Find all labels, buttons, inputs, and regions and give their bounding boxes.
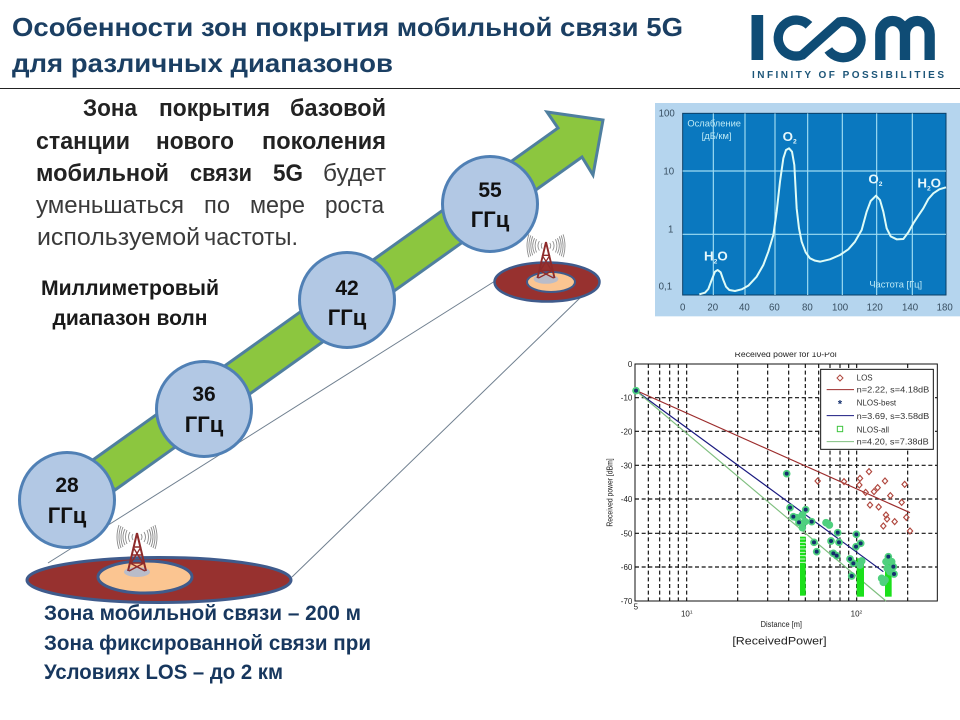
legend [821, 369, 933, 449]
chart: attenuation vs frequency: 80 [802, 302, 813, 313]
text block: coverage description: базовой [290, 95, 386, 122]
logo: ICOM [752, 15, 944, 81]
axes labels: 0 [628, 360, 633, 369]
circle: 28 GHz: 28 [55, 474, 79, 497]
axes labels: 10 [681, 610, 690, 619]
coverage zone: large with tower [27, 525, 291, 602]
chart: attenuation vs frequency: 2 [927, 185, 931, 192]
axes labels: -30 [621, 461, 633, 470]
axes labels: 1 [690, 609, 693, 615]
markers: LOS [815, 469, 913, 534]
axes labels: -10 [621, 394, 633, 403]
text block: coverage description: покрытия [159, 95, 270, 122]
text block: coverage description: поколения [262, 128, 386, 155]
text block: coverage description: уменьшаться [36, 192, 184, 219]
text block: coverage description: Зона [83, 95, 138, 122]
axes labels: [ReceivedPower] [732, 635, 827, 647]
chart: attenuation vs frequency: 100 [832, 302, 848, 313]
title: для различных диапазонов [12, 48, 393, 78]
label: millimeter wave band: Миллиметровый [41, 277, 219, 300]
chart: attenuation vs frequency: O [931, 176, 941, 191]
text block: coverage description: мере [250, 192, 305, 219]
label: millimeter wave band: диапазон волн [52, 307, 208, 330]
text block: coverage description: частоты. [204, 224, 298, 251]
circle: 36 GHz: ГГц [185, 412, 224, 437]
chart: attenuation vs frequency: O [717, 249, 728, 264]
chart: received power vs distance [605, 349, 937, 647]
chart: attenuation vs frequency: 120 [867, 302, 883, 313]
legend: n=2.22, s=4.18dB [857, 386, 929, 395]
legend: LOS [857, 373, 873, 382]
legend: n=4.20, s=7.38dB [857, 437, 929, 446]
chart: attenuation vs frequency: 10 [663, 166, 674, 177]
markers: NLOS-best [636, 391, 894, 576]
chart: attenuation vs frequency: 20 [707, 302, 718, 313]
circle: 36 GHz: 36 [192, 383, 216, 406]
legend: NLOS-all [857, 425, 889, 434]
text block: coverage description: связи [190, 160, 252, 187]
coverage notes: Зона фиксированной связи при [44, 632, 371, 655]
chart: attenuation vs frequency: 140 [902, 302, 918, 313]
chart: attenuation vs frequency: 40 [739, 302, 750, 313]
title: Особенности зон покрытия мобильной связи 5G [12, 12, 683, 42]
chart: attenuation vs frequency: O [783, 129, 793, 144]
text block: coverage description: будет [323, 160, 386, 187]
chart: attenuation vs frequency: 2 [879, 181, 883, 188]
text block: coverage description: используемой [37, 224, 200, 251]
chart: attenuation vs frequency: H [917, 176, 927, 191]
label: millimeter wave band [41, 277, 219, 330]
axes labels: 5 [634, 602, 639, 611]
axes labels: -70 [621, 597, 633, 606]
axes labels: -20 [621, 427, 633, 436]
text block: coverage description: роста [325, 192, 385, 219]
coverage notes [44, 602, 371, 684]
chart: attenuation vs frequency: 2 [714, 258, 718, 265]
title [12, 12, 683, 78]
chart: attenuation vs frequency: O [868, 171, 879, 186]
chart: attenuation vs frequency: [дБ/км] [702, 131, 732, 141]
circle: 42 GHz: ГГц [328, 305, 367, 330]
axes labels: Received power [dBm] [605, 458, 614, 527]
chart: attenuation vs frequency: 100 [659, 109, 675, 120]
circle: 42 GHz: 42 [335, 277, 359, 300]
circle: 36 GHz [156, 362, 252, 456]
axes labels: -50 [621, 529, 633, 538]
circle: 55 GHz [442, 156, 538, 252]
chart: attenuation vs frequency: 1 [668, 224, 673, 235]
chart: attenuation vs frequency: H [704, 249, 714, 264]
markers: NLOS-all halos [636, 391, 894, 582]
coverage notes: Зона мобильной связи – 200 м [44, 602, 361, 625]
chart: attenuation vs frequency [655, 103, 960, 316]
projection lines [48, 281, 582, 577]
text block: coverage description: 5G [273, 160, 303, 187]
text block: coverage description: станции [36, 128, 130, 155]
axes labels: -60 [621, 563, 633, 572]
text block: coverage description: по [204, 192, 230, 219]
chart: attenuation vs frequency: Ослабление [687, 118, 741, 128]
coverage zone: small with tower [494, 234, 600, 302]
axes labels: -40 [621, 495, 633, 504]
legend: * [838, 399, 843, 411]
circle: 28 GHz [20, 452, 114, 548]
arrow: frequency growth [90, 112, 603, 490]
chart: received power vs distance: Received power for 10-Pol [735, 349, 837, 359]
circle: 42 GHz [300, 252, 394, 348]
text block: coverage description [36, 95, 386, 251]
chart: attenuation vs frequency: 2 [793, 139, 797, 146]
circle: 55 GHz: 55 [478, 179, 502, 202]
legend: n=3.69, s=3.58dB [857, 412, 929, 421]
circle: 28 GHz: ГГц [48, 503, 87, 528]
axes labels [605, 360, 863, 647]
chart: attenuation vs frequency: 0 [680, 302, 685, 313]
coverage notes: Условиях LOS – до 2 км [44, 661, 283, 684]
chart: attenuation vs frequency: Частота [Гц] [869, 280, 922, 290]
axes labels: 2 [860, 609, 863, 615]
chart: attenuation vs frequency: 180 [937, 302, 953, 313]
axes labels: Distance [m] [761, 620, 802, 629]
chart: attenuation vs frequency: 0,1 [659, 282, 672, 293]
circle: 55 GHz: ГГц [471, 207, 510, 232]
text block: coverage description: нового [156, 128, 234, 155]
legend: NLOS-best [857, 399, 897, 408]
logo: ICOM: INFINITY OF POSSIBILITIES [752, 70, 944, 81]
text block: coverage description: мобильной [36, 160, 169, 187]
axes labels: 10 [851, 610, 860, 619]
chart: attenuation vs frequency: 60 [769, 302, 780, 313]
